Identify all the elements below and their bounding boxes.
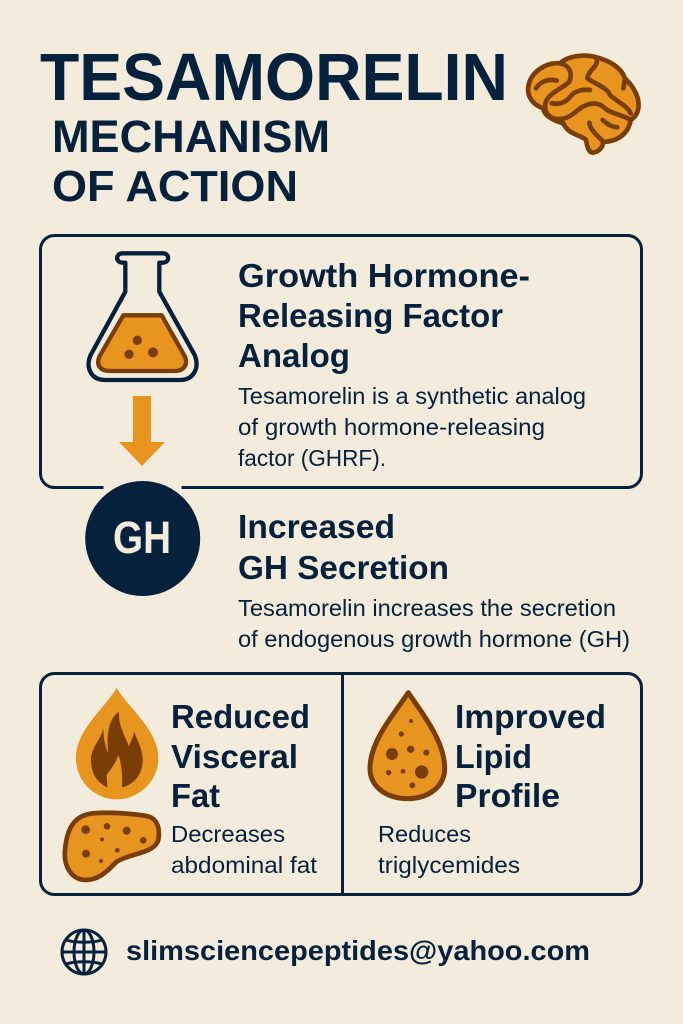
title: MECHANISM xyxy=(52,111,330,162)
icon: fat drop with flame xyxy=(76,688,158,799)
heading: growth hormone-releasing factor analog xyxy=(238,257,530,374)
icon: GH badge xyxy=(85,480,200,596)
heading: growth hormone-releasing factor analog: Analog xyxy=(238,337,350,374)
heading: reduced visceral fat: Reduced xyxy=(171,698,310,735)
icon: lipid droplet xyxy=(370,693,445,799)
heading: improved lipid profile: Profile xyxy=(455,777,560,814)
heading: improved lipid profile xyxy=(455,698,606,814)
heading: improved lipid profile: Improved xyxy=(455,698,606,735)
text: decreases abdominal fat xyxy=(171,821,318,878)
text: GH secretion description: Tesamorelin increases the secretion xyxy=(238,595,616,621)
text: reduces triglycerides: triglycemides xyxy=(378,852,520,878)
contact email: slimsciencepeptides@yahoo.com xyxy=(126,935,590,966)
text: analog description xyxy=(238,383,586,471)
heading: improved lipid profile: Lipid xyxy=(455,738,532,775)
heading: reduced visceral fat: Fat xyxy=(171,777,220,814)
heading: increased GH secretion: Increased xyxy=(238,508,395,545)
icon: flask xyxy=(89,253,196,380)
heading: reduced visceral fat: Visceral xyxy=(171,738,298,775)
text: analog description: factor (GHRF). xyxy=(238,445,386,471)
icon: liver xyxy=(65,813,159,880)
title xyxy=(40,40,508,211)
icon: GH badge: GH xyxy=(113,512,171,563)
heading: growth hormone-releasing factor analog: Growth Hormone- xyxy=(238,257,530,294)
text: analog description: of growth hormone-releasing xyxy=(238,414,545,440)
icon: globe xyxy=(62,930,106,974)
title: TESAMORELIN xyxy=(40,40,508,115)
text: decreases abdominal fat: abdominal fat xyxy=(171,852,318,878)
heading: increased GH secretion: GH Secretion xyxy=(238,549,449,586)
text: reduces triglycerides: Reduces xyxy=(378,821,471,847)
title: OF ACTION xyxy=(52,162,298,211)
text: GH secretion description: of endogenous growth hormone (GH) xyxy=(238,626,630,652)
text: decreases abdominal fat: Decreases xyxy=(171,821,285,847)
text: GH secretion description xyxy=(238,595,630,652)
heading: reduced visceral fat xyxy=(171,698,310,814)
panel: growth hormone-releasing factor analog xyxy=(40,236,642,488)
icon: brain xyxy=(528,56,639,153)
panel: outcomes xyxy=(40,673,642,894)
arrow: flask to GH xyxy=(119,396,165,466)
heading: increased GH secretion xyxy=(238,508,449,586)
text: reduces triglycerides xyxy=(378,821,520,878)
heading: growth hormone-releasing factor analog: Releasing Factor xyxy=(238,297,503,334)
text: analog description: Tesamorelin is a synthetic analog xyxy=(238,383,586,409)
